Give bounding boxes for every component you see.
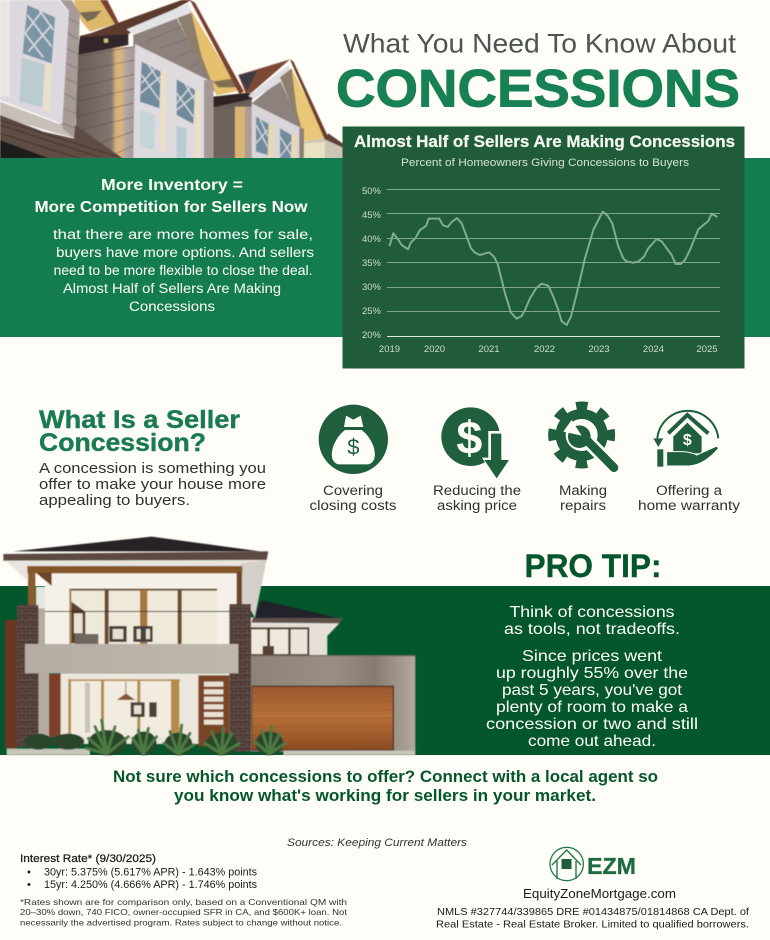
y axis labels: 45% bbox=[362, 210, 382, 221]
text: concession definition: offer to make your house more bbox=[39, 476, 266, 493]
upper wall and glass bbox=[45, 573, 238, 645]
panel: more inventory text: need to be more flexible to close the deal. bbox=[54, 263, 312, 278]
icon: reducing price bbox=[441, 407, 511, 481]
sources: Sources: Keeping Current Matters bbox=[287, 837, 468, 849]
panel: more inventory text: More Inventory = bbox=[101, 177, 243, 194]
rate disclaimer: necessarily the advertised program. Rates subject to change without notice. bbox=[20, 918, 342, 928]
photo: modern two-storey house bbox=[3, 537, 415, 755]
panel: more inventory text: Almost Half of Sellers Are Making bbox=[63, 281, 281, 296]
panel: more inventory text: that there are more homes for sale, bbox=[53, 227, 313, 242]
call to action: Not sure which concessions to offer? Connect with a local agent so bbox=[113, 768, 658, 786]
balcony bbox=[25, 644, 238, 673]
y axis labels: 40% bbox=[362, 234, 382, 245]
interest rates: 15yr: 4.250% (4.666% APR) - 1.746% points bbox=[44, 879, 257, 891]
text: concession definition: A concession is something you bbox=[39, 460, 266, 477]
shrubs and plants bbox=[24, 730, 283, 755]
interest rates bbox=[20, 853, 257, 891]
icon: home warranty bbox=[653, 411, 719, 467]
heading: what is a seller concession: Concession? bbox=[39, 429, 206, 457]
rate disclaimer bbox=[20, 897, 348, 928]
soffit bbox=[6, 560, 267, 617]
logo: EZM: EZM bbox=[587, 853, 636, 879]
title bbox=[336, 28, 740, 118]
right dormer bbox=[213, 93, 253, 159]
interest rates: Interest Rate* (9/30/2025) bbox=[20, 853, 156, 865]
chart subtitle: Percent of Homeowners Giving Concessions to Buyers bbox=[401, 157, 690, 169]
left wood and stone bbox=[5, 620, 17, 748]
icon labels: Reducing the bbox=[433, 483, 521, 498]
green inventory band bbox=[0, 158, 770, 337]
y axis labels: 20% bbox=[362, 330, 382, 341]
icon: home warranty: $ bbox=[683, 432, 692, 449]
icon labels: asking price bbox=[437, 498, 517, 513]
call to action bbox=[113, 768, 658, 805]
text: pro tip body: as tools, not tradeoffs. bbox=[504, 621, 680, 638]
y axis labels: 35% bbox=[362, 258, 382, 269]
icon labels: closing costs bbox=[310, 498, 397, 513]
x axis labels bbox=[379, 344, 718, 355]
y axis labels: 25% bbox=[362, 306, 382, 317]
call to action: you know what's working for sellers in your market. bbox=[174, 787, 596, 805]
rate disclaimer: 20–30% down, 740 FICO, owner-occupied SFR in CA, and $600K+ loan. Not bbox=[20, 907, 348, 917]
icon: gear and wrench bbox=[552, 406, 614, 468]
text: pro tip body: Since prices went bbox=[522, 648, 663, 665]
licensing text: NMLS #327744/339865 DRE #01434875/01814868 CA Dept. of bbox=[437, 906, 749, 918]
ground floor bbox=[61, 673, 229, 744]
photo: row of houses with dormer windows bbox=[0, 0, 345, 159]
icon labels: home warranty bbox=[638, 498, 740, 513]
ground bbox=[7, 749, 90, 755]
x axis labels: 2025 bbox=[696, 344, 718, 355]
left dormer siding bbox=[47, 0, 80, 139]
left dormer window bbox=[0, 0, 69, 124]
panel: line chart bbox=[342, 126, 744, 368]
logo: EZM bbox=[550, 847, 636, 881]
text: concession definition bbox=[39, 460, 266, 509]
icon labels: repairs bbox=[560, 498, 606, 513]
right wing bbox=[251, 617, 340, 656]
y axis labels bbox=[362, 186, 382, 341]
panel: more inventory text bbox=[34, 177, 314, 314]
text: pro tip body: plenty of room to make a bbox=[496, 699, 688, 716]
heading: what is a seller concession bbox=[39, 406, 240, 457]
x axis labels: 2024 bbox=[643, 344, 664, 355]
icon labels: Covering bbox=[323, 483, 383, 498]
icon: money bag: $ bbox=[347, 434, 359, 459]
brick pillars bbox=[17, 605, 38, 747]
panel: more inventory text: More Competition for Sellers Now bbox=[34, 199, 309, 216]
x axis labels: 2019 bbox=[379, 344, 400, 355]
far right small roof bbox=[304, 133, 345, 159]
text: pro tip body: come out ahead. bbox=[528, 733, 656, 750]
y axis labels: 50% bbox=[362, 186, 382, 197]
interest rates: • bbox=[27, 879, 31, 891]
x axis labels: 2023 bbox=[588, 344, 610, 355]
chart gridlines bbox=[387, 190, 720, 336]
icon: reducing price: $ bbox=[456, 411, 482, 463]
panel: more inventory text: buyers have more options. And sellers bbox=[56, 245, 314, 260]
chart heading: Almost Half of Sellers Are Making Concessions bbox=[354, 133, 735, 151]
rate disclaimer: *Rates shown are for comparison only, based on a Conventional QM with bbox=[20, 897, 347, 907]
lower roof bbox=[0, 102, 75, 139]
text: pro tip body: up roughly 55% over the bbox=[496, 665, 688, 682]
center dormer gable bbox=[204, 80, 213, 97]
garage wall and door bbox=[251, 655, 415, 752]
icon labels: Making bbox=[559, 483, 607, 498]
text: concession definition: appealing to buyers. bbox=[39, 492, 190, 509]
website: EquityZoneMortgage.com bbox=[523, 886, 676, 901]
dark green pro tip band bbox=[0, 586, 770, 755]
data line bbox=[390, 212, 717, 325]
interest rates: • bbox=[27, 866, 31, 878]
text: pro tip body: concession or two and still bbox=[486, 716, 698, 733]
title: CONCESSIONS bbox=[336, 60, 740, 118]
licensing text bbox=[436, 906, 749, 930]
y axis labels: 30% bbox=[362, 282, 382, 293]
center dormer window frame bbox=[133, 44, 208, 159]
heading: pro tip: PRO TIP: bbox=[524, 548, 662, 584]
interest rates: 30yr: 5.375% (5.617% APR) - 1.643% points bbox=[44, 866, 257, 878]
center siding wall bbox=[76, 47, 135, 159]
text: pro tip body: Think of concessions bbox=[510, 604, 674, 621]
x axis labels: 2021 bbox=[478, 344, 500, 355]
text: pro tip body bbox=[486, 604, 698, 750]
panel: more inventory text: Concessions bbox=[129, 299, 215, 314]
icon: money bag bbox=[319, 405, 388, 474]
heading: what is a seller concession: What Is a Seller bbox=[39, 406, 240, 434]
icon labels bbox=[310, 483, 740, 513]
soffit between first two dormers bbox=[73, 0, 117, 32]
text: pro tip body: past 5 years, you've got bbox=[502, 682, 683, 699]
title: What You Need To Know About bbox=[343, 28, 737, 58]
center eave and roof bbox=[77, 24, 128, 55]
x axis labels: 2022 bbox=[534, 344, 555, 355]
x axis labels: 2020 bbox=[424, 344, 445, 355]
licensing text: Real Estate - Real Estate Broker. Limited to qualified borrowers. bbox=[436, 918, 749, 930]
icon labels: Offering a bbox=[656, 483, 723, 498]
